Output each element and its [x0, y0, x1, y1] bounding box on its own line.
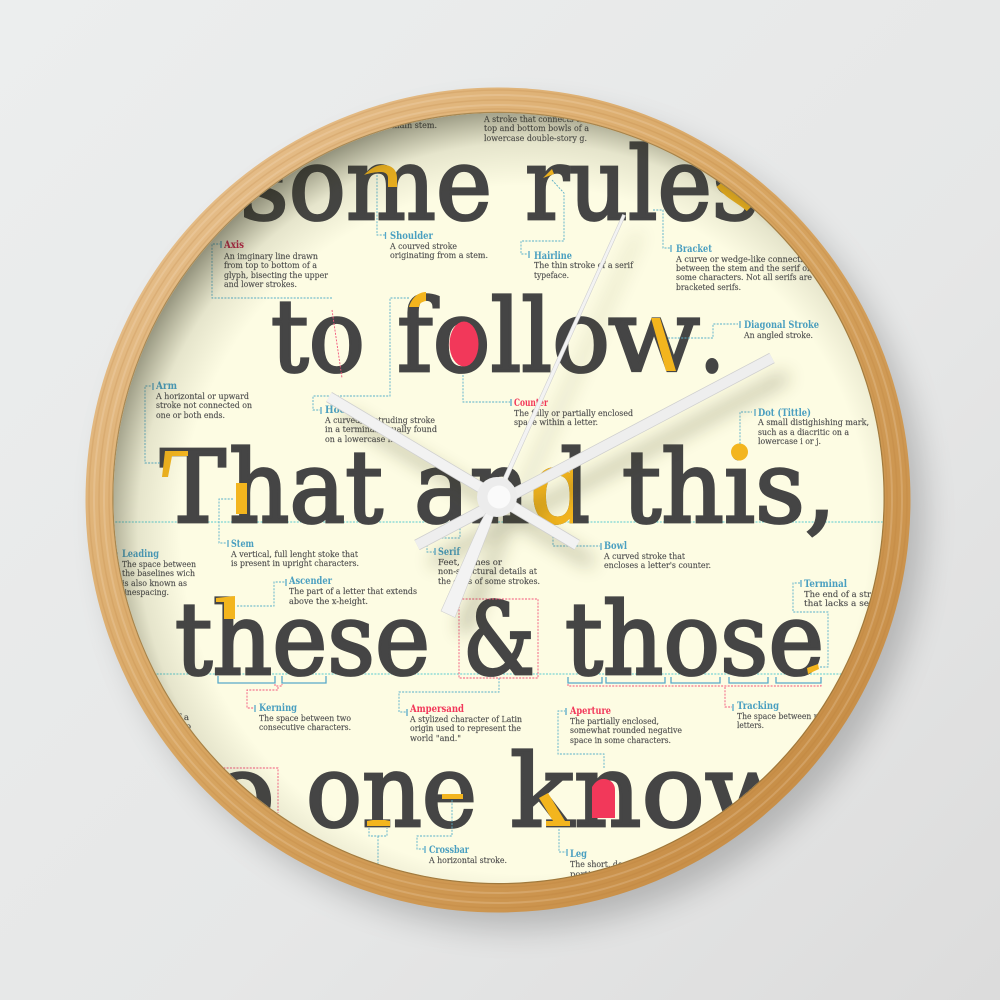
- callout: bracket: A curve or wedge-like connection: [675, 255, 813, 265]
- clock wall shadow: [104, 108, 924, 928]
- callout: stem: is present in upright characters.: [231, 559, 359, 569]
- callout: counter: Counter: [514, 397, 548, 409]
- callout: serif: Serif: [438, 546, 461, 558]
- callout: ascender: Ascender: [288, 575, 332, 587]
- callout: tracking: Tracking: [737, 700, 780, 712]
- highlight: e terminal: [807, 664, 819, 674]
- callout: bowl: A curved stroke that: [603, 552, 685, 562]
- callout: hook: [313, 298, 437, 445]
- callout: dot (tittle): A small distighishing mark,: [757, 418, 869, 428]
- callout: leading: Leading: [122, 548, 160, 560]
- callout: bowl: [552, 537, 710, 568]
- highlight: s spine: [720, 184, 750, 208]
- callout: axis: [212, 239, 342, 378]
- highlight: n aperture: [592, 779, 615, 818]
- callout: aperture: somewhat rounded negative: [570, 726, 682, 736]
- callout: stem: [219, 499, 359, 569]
- highlight: w diagonal stroke: [651, 318, 676, 371]
- headline line 2: to follow.: [272, 293, 718, 374]
- clock face: [100, 100, 900, 900]
- callout: diagonal stroke: Diagonal Stroke: [744, 319, 819, 331]
- callout: crossbar: A horizontal stroke.: [428, 856, 507, 866]
- minute hand: [329, 397, 577, 545]
- hub: [477, 477, 517, 517]
- headline line 4: these & those: these: [175, 581, 430, 698]
- callout: bracket: bracketed serifs.: [676, 283, 741, 293]
- callout: axis: An imginary line drawn: [223, 252, 318, 262]
- callout: terminal: that lacks a serif.: [804, 599, 882, 609]
- callout: shoulder: A courved stroke: [389, 242, 457, 252]
- callout: tracking: The space between pairs of: [737, 712, 844, 722]
- callout: counter: space within a letter.: [514, 418, 598, 428]
- callout: aperture: [558, 705, 682, 768]
- callout: terminal: Terminal: [804, 578, 847, 590]
- callout: hairline: The thin stroke of a serif: [534, 261, 634, 271]
- callout: top stem fragment: main stem.: [392, 121, 437, 131]
- callout: left fragment and letter-o box: glyph to: [156, 722, 191, 732]
- callout: hook: Hook: [325, 404, 353, 416]
- callout: dot (tittle): [740, 407, 869, 447]
- headline line 2: to follow.: .: [699, 278, 725, 395]
- highlight: h ascender: [216, 596, 235, 619]
- callout: leg: portion of a letter.: [570, 870, 648, 880]
- highlight: d bowl: and: [414, 429, 590, 546]
- headline line 1: some rules: some: [240, 126, 492, 243]
- callout: hook: on a lowercase f.: [325, 435, 393, 445]
- callout: diagonal stroke: [668, 319, 819, 341]
- callout: terminal: The end of a stroke: [804, 590, 886, 600]
- callout: spine: [483, 115, 589, 144]
- callout: diagonal stroke: An angled stroke.: [743, 331, 813, 341]
- headline line 3: That and this,: [160, 444, 828, 538]
- callout: ampersand: origin used to represent the: [410, 724, 521, 734]
- headline line 4: these & those: &: [463, 581, 535, 698]
- highlight: T arm: [162, 451, 188, 477]
- hand shadows: [344, 232, 787, 635]
- callout: shoulder: originating from a stem.: [390, 251, 488, 261]
- headline line 1: some rules: [244, 141, 754, 222]
- callout: hairline: [521, 180, 634, 281]
- callout: bracket: [653, 210, 813, 293]
- callout: bracket: between the stem and the serif on: [676, 264, 812, 274]
- callout: ampersand: A stylized character of Latin: [409, 715, 522, 725]
- headline line 3: That and this,: and: [414, 429, 590, 546]
- callout: shoulder: Shoulder: [390, 230, 433, 242]
- callout: spine: A stroke that connects the: [483, 115, 589, 125]
- callout: left fragment and letter-o box: [152, 713, 387, 865]
- highlight: r hairline: [543, 169, 554, 178]
- callout: arm: Arm: [155, 380, 177, 392]
- callout: leading: [117, 548, 196, 598]
- callout: hook: in a terminal, usually found: [325, 425, 437, 435]
- callout: hook: A curved, protruding stroke: [324, 416, 435, 426]
- second hand: [441, 214, 625, 618]
- callout: kerning: The space between two: [259, 714, 351, 724]
- callout: dot (tittle): such as a diacritic on a: [758, 428, 849, 438]
- callout: counter: [463, 375, 633, 428]
- callout: ampersand: world "and.": [410, 734, 461, 744]
- glyph highlights: [162, 165, 819, 826]
- callout: shoulder: [377, 175, 488, 261]
- callout: serif: Feet, spines or: [438, 558, 503, 568]
- callout: left fragment and letter-o box: part of a: [152, 713, 189, 723]
- baselines: [112, 522, 885, 674]
- headline line 5: no one know: [230, 748, 760, 829]
- callout: ascender: [237, 575, 417, 607]
- callout: arm: stroke not connected on: [156, 401, 252, 411]
- headline line 5: no one know: no: [140, 733, 275, 850]
- callout: ascender: The part of a letter that extends: [289, 587, 417, 597]
- callout: ascender: above the x-height.: [289, 597, 368, 607]
- callout: leading: linespacing.: [122, 588, 169, 598]
- callout: tracking: [568, 677, 844, 731]
- highlight: h stem: [236, 483, 247, 514]
- callout: axis: and lower strokes.: [224, 280, 297, 290]
- callout: leading: is also known as: [122, 579, 187, 589]
- callout: stem: Stem: [231, 538, 254, 550]
- callout: bracket: some characters. Not all serifs are: [676, 273, 812, 283]
- callout: bowl: Bowl: [604, 540, 627, 552]
- headline line 5: no one know: know: [510, 733, 795, 850]
- callout: ampersand: Ampersand: [409, 703, 465, 715]
- callout: kerning: Kerning: [259, 702, 298, 714]
- highlight: i dot: [731, 444, 748, 460]
- callout: counter: The fully or partially enclosed: [514, 409, 633, 419]
- highlight: m shoulder: [364, 165, 397, 187]
- callout: axis: glyph, bisecting the upper: [224, 271, 329, 281]
- callout: hairline: typeface.: [534, 271, 569, 281]
- wooden frame: [86, 88, 910, 912]
- headline line 1: some rules: rules: [525, 126, 759, 243]
- callout: aperture: Aperture: [569, 705, 611, 717]
- headline line 4: these & those: those: [565, 581, 824, 698]
- headline line 2: to follow.: to: [271, 278, 365, 395]
- callout: spine: top and bottom bowls of a: [484, 124, 589, 134]
- highlight: o counter: [450, 322, 478, 366]
- headline line 2: to follow.: w: [608, 278, 700, 395]
- headline line 2: to follow.: follo: [397, 278, 610, 395]
- inner rim shadow: [100, 100, 900, 900]
- callout: arm: [145, 380, 252, 463]
- headline line 3: That and this,: T: [160, 429, 226, 546]
- callout: dot (tittle): lowercase i or j.: [758, 437, 821, 447]
- callout: crossbar: Crossbar: [429, 844, 469, 856]
- callout: aperture: The partially enclosed,: [570, 717, 659, 727]
- callout: dot (tittle): Dot (Tittle): [758, 407, 811, 419]
- callout: axis: Axis: [223, 239, 244, 251]
- callout: arm: one or both ends.: [156, 411, 225, 421]
- callout: terminal: [793, 578, 886, 667]
- callout: ampersand: [399, 599, 538, 744]
- callout: spine: lowercase double-story g.: [484, 134, 587, 144]
- callout: aperture: space in some characters.: [570, 736, 671, 746]
- callout: serif: non-structural details at: [438, 567, 538, 577]
- callout: stem: A vertical, full lenght stoke that: [230, 550, 358, 560]
- callout: serif: [427, 525, 540, 587]
- callout: leg: [559, 829, 658, 880]
- callout: bowl: encloses a letter's counter.: [604, 561, 711, 571]
- callout: tracking: letters.: [737, 721, 764, 731]
- highlight: f hook: [409, 292, 426, 307]
- callout: arm: A horizontal or upward: [155, 392, 249, 402]
- callout: axis: from top to bottom of a: [224, 261, 317, 271]
- headline line 4: these & those: [176, 596, 821, 677]
- callout: leg: Leg: [570, 848, 588, 860]
- callout: serif: the ends of some strokes.: [438, 577, 540, 587]
- callout: leading: The space between: [122, 560, 196, 570]
- callout: leading: the baselines wich: [122, 569, 195, 579]
- highlight: n serif: [367, 820, 390, 826]
- clock hands: [329, 214, 772, 618]
- callout: kerning: consecutive characters.: [259, 723, 351, 733]
- highlight: e crossbar: [442, 794, 463, 799]
- hour hand: [417, 358, 772, 545]
- callout: crossbar: [417, 800, 507, 866]
- headline line 3: That and this,: hat: [229, 429, 383, 546]
- headline line 5: no one know: one: [306, 733, 477, 850]
- callout: bracket: Bracket: [676, 243, 712, 255]
- highlight: k leg: [539, 793, 570, 826]
- callout: kerning: [218, 676, 351, 733]
- callout: hairline: Hairline: [534, 250, 572, 262]
- callout: leg: The short, descending: [570, 860, 658, 870]
- headline line 3: That and this,: this,: [622, 429, 836, 546]
